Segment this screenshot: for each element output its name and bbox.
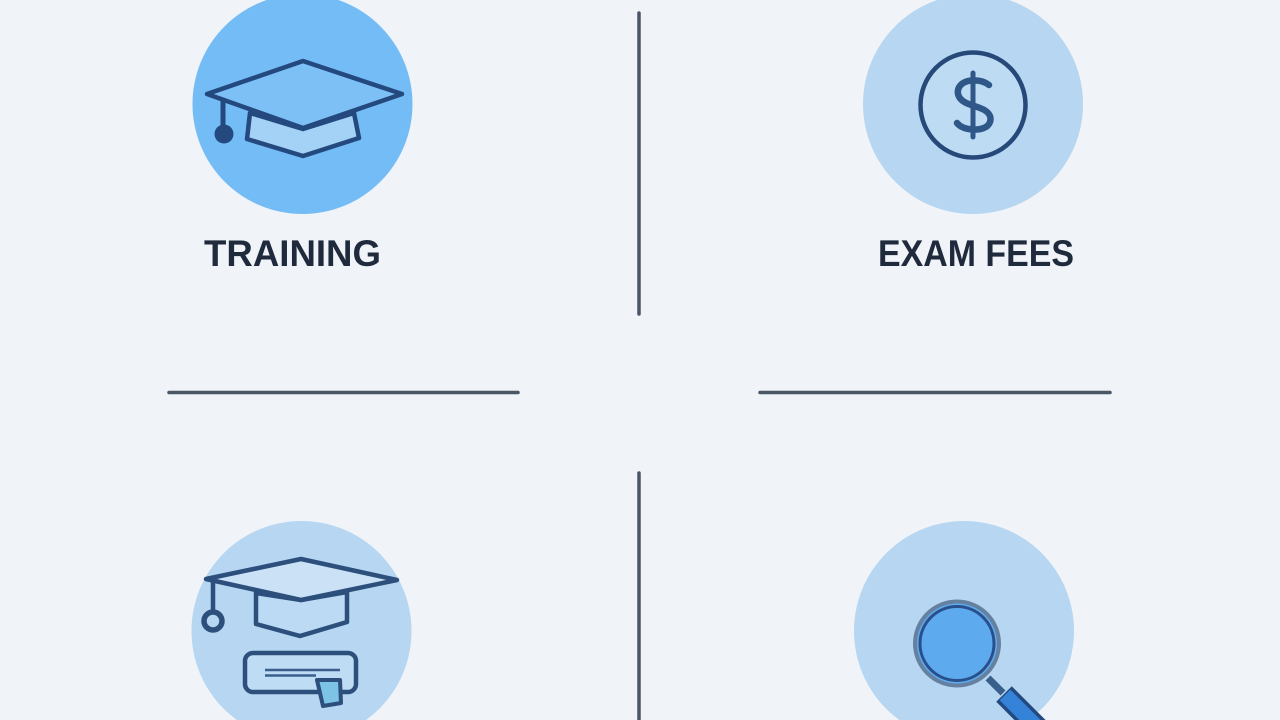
icon: magnifying glass (854, 521, 1074, 720)
icon: dollar coin on pale blue circle (863, 0, 1083, 214)
heading: exam fees: EXAM FEES (878, 233, 1074, 274)
heading: training: TRAINING (204, 233, 381, 274)
panel: training (192, 0, 412, 274)
icon: graduation cap on bright blue circle (192, 0, 412, 214)
icon: graduation cap with diploma (192, 521, 412, 720)
panel: exam fees (863, 0, 1083, 274)
